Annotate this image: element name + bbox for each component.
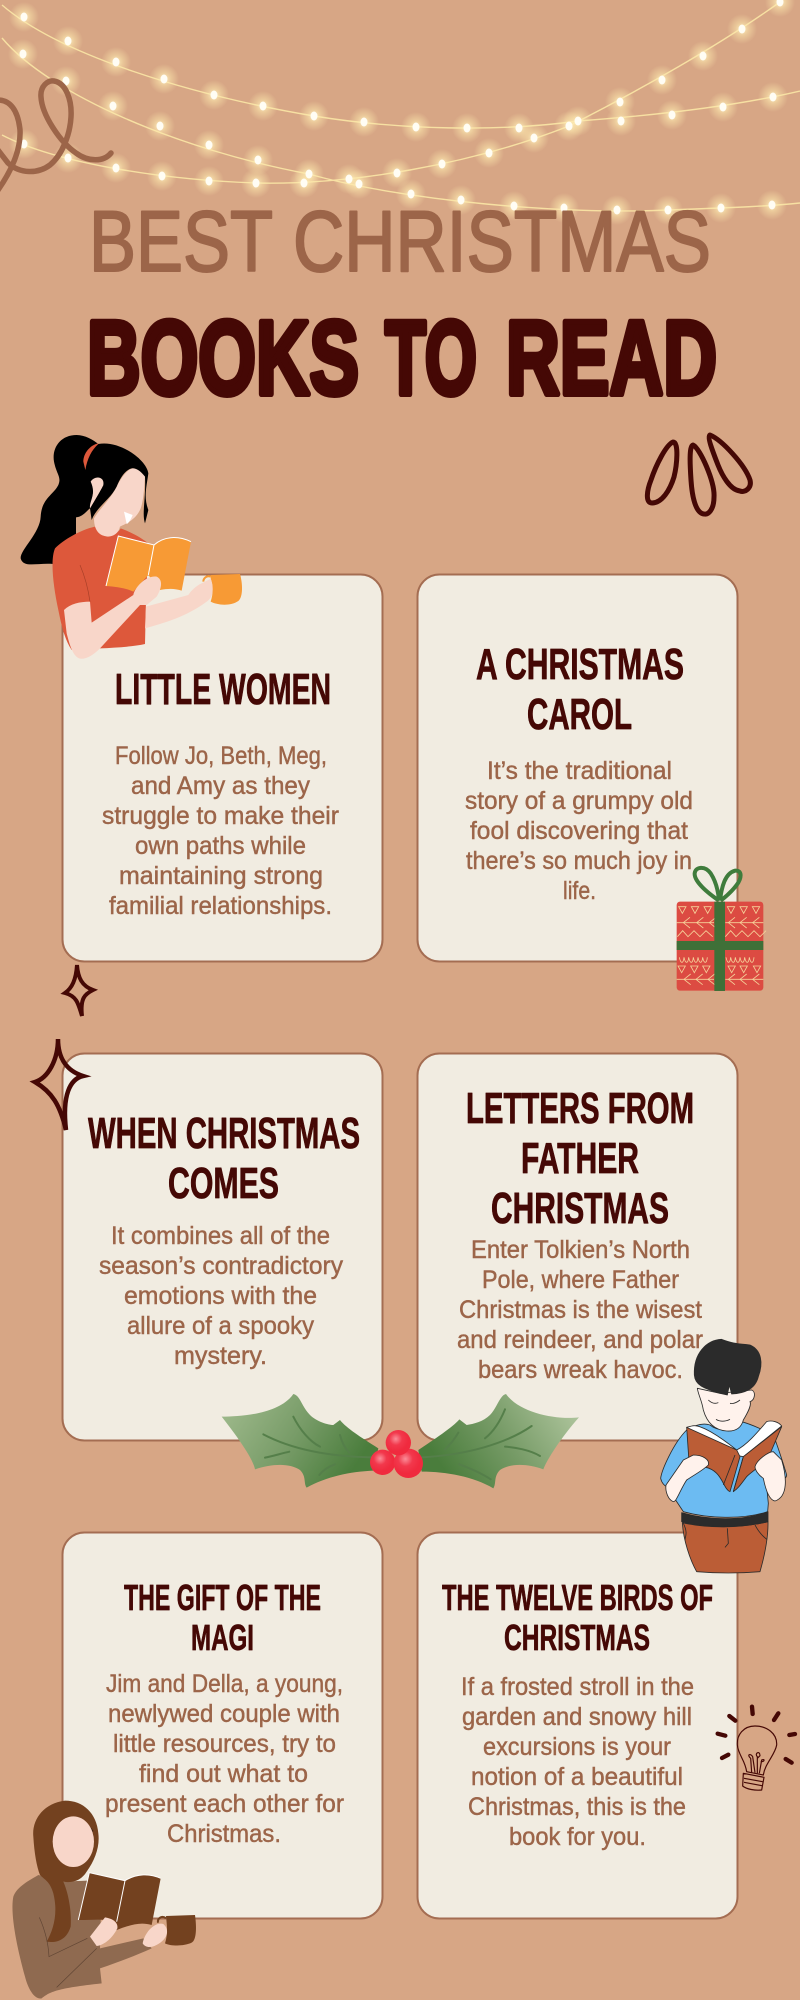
icon: curl doodle xyxy=(0,81,111,190)
text: a christmas carol description: fool discovering that xyxy=(470,817,688,845)
title: books to read: BOOKS xyxy=(87,300,359,417)
heading: when christmas comes xyxy=(88,1109,360,1208)
heading: a christmas carol xyxy=(476,640,684,739)
heading: the twelve birds of christmas xyxy=(442,1577,713,1658)
panel: the twelve birds of christmas xyxy=(418,1532,738,1918)
text: the gift of the magi description: Jim and Della, a young, xyxy=(106,1670,343,1698)
text: a christmas carol description xyxy=(465,757,693,905)
text: the twelve birds of christmas description xyxy=(461,1673,694,1851)
text: the twelve birds of christmas description: garden and snowy hill xyxy=(462,1703,692,1731)
text: the twelve birds of christmas description: excursions is your xyxy=(483,1733,671,1761)
text: when christmas comes description: allure of a spooky xyxy=(127,1312,314,1340)
right holly leaf xyxy=(418,1394,579,1488)
text: letters from father christmas description: and reindeer, and polar xyxy=(457,1326,703,1354)
text: the gift of the magi description: present each other for xyxy=(105,1790,344,1818)
text: a christmas carol description: there’s so much joy in xyxy=(466,847,692,875)
heading: a christmas carol: A CHRISTMAS xyxy=(476,640,684,689)
text: little women description: struggle to make their xyxy=(102,802,339,830)
text: when christmas comes description xyxy=(99,1222,343,1370)
heading: a christmas carol: CAROL xyxy=(527,690,632,739)
text: a christmas carol description: life. xyxy=(563,877,596,905)
text: the gift of the magi description: little resources, try to xyxy=(113,1730,336,1758)
icon: sparkle small xyxy=(65,965,93,1016)
heading: the twelve birds of christmas: CHRISTMAS xyxy=(504,1617,650,1658)
text: letters from father christmas description xyxy=(457,1236,703,1384)
text: little women description: familial relationships. xyxy=(109,892,332,920)
panel: the gift of the magi xyxy=(62,1532,382,1918)
text: little women description: and Amy as they xyxy=(131,772,310,800)
heading: little women: LITTLE WOMEN xyxy=(115,665,331,714)
text: when christmas comes description: It combines all of the xyxy=(111,1222,330,1250)
heading: letters from father christmas xyxy=(466,1084,694,1233)
heading: letters from father christmas: FATHER xyxy=(521,1134,639,1183)
panel: a christmas carol xyxy=(418,574,738,962)
text: letters from father christmas description: Pole, where Father xyxy=(482,1266,679,1294)
panel: when christmas comes xyxy=(62,1054,382,1440)
text: letters from father christmas description: Enter Tolkien’s North xyxy=(471,1236,690,1264)
text: the gift of the magi description: newlywed couple with xyxy=(108,1700,340,1728)
heading: when christmas comes: WHEN CHRISTMAS xyxy=(88,1109,360,1158)
title: best christmas xyxy=(89,194,711,290)
text: little women description: maintaining strong xyxy=(119,862,323,890)
icon: three leaf doodle xyxy=(647,435,750,514)
text: the twelve birds of christmas description: notion of a beautiful xyxy=(471,1763,683,1791)
berries xyxy=(370,1430,423,1478)
icon: boy reading xyxy=(661,1339,787,1573)
heading: letters from father christmas: CHRISTMAS xyxy=(491,1184,669,1233)
text: little women description: Follow Jo, Beth, Meg, xyxy=(115,742,327,770)
icon: woman in hijab reading xyxy=(12,1801,196,1999)
icon: gift box xyxy=(677,868,766,991)
text: the gift of the magi description xyxy=(105,1670,344,1848)
text: a christmas carol description: story of a grumpy old xyxy=(465,787,693,815)
text: when christmas comes description: season’s contradictory xyxy=(99,1252,343,1280)
title: books to read: TO xyxy=(385,300,477,417)
text: letters from father christmas description: bears wreak havoc. xyxy=(478,1356,683,1384)
icon: woman reading with cup xyxy=(21,435,242,659)
panel: letters from father christmas xyxy=(418,1054,738,1440)
heading: the gift of the magi: THE GIFT OF THE xyxy=(124,1577,321,1618)
text: the twelve birds of christmas description: If a frosted stroll in the xyxy=(461,1673,694,1701)
title: best christmas: BEST xyxy=(89,194,273,290)
heading: letters from father christmas: LETTERS FROM xyxy=(466,1084,694,1133)
left holly leaf xyxy=(222,1394,378,1488)
text: little women description xyxy=(102,742,339,920)
string lights xyxy=(2,0,800,225)
text: the gift of the magi description: Christmas. xyxy=(167,1820,281,1848)
text: when christmas comes description: emotions with the xyxy=(124,1282,317,1310)
title: best christmas: CHRISTMAS xyxy=(293,194,711,290)
text: little women description: own paths while xyxy=(135,832,306,860)
title: books to read: READ xyxy=(506,300,717,417)
text: letters from father christmas description: Christmas is the wisest xyxy=(459,1296,702,1324)
icon: sparkle large xyxy=(35,1039,83,1130)
text: a christmas carol description: It’s the traditional xyxy=(487,757,672,785)
icon: holly and berries xyxy=(222,1394,579,1488)
heading: when christmas comes: COMES xyxy=(168,1159,279,1208)
title: books to read xyxy=(87,300,717,417)
heading: the gift of the magi: MAGI xyxy=(191,1617,254,1658)
text: the gift of the magi description: find out what to xyxy=(139,1760,308,1788)
text: when christmas comes description: mystery. xyxy=(174,1342,267,1370)
text: the twelve birds of christmas description: Christmas, this is the xyxy=(468,1793,686,1821)
text: the twelve birds of christmas description: book for you. xyxy=(509,1823,646,1851)
heading: the gift of the magi xyxy=(124,1577,321,1658)
panel: little women xyxy=(62,574,382,962)
icon: light bulb xyxy=(718,1707,795,1790)
